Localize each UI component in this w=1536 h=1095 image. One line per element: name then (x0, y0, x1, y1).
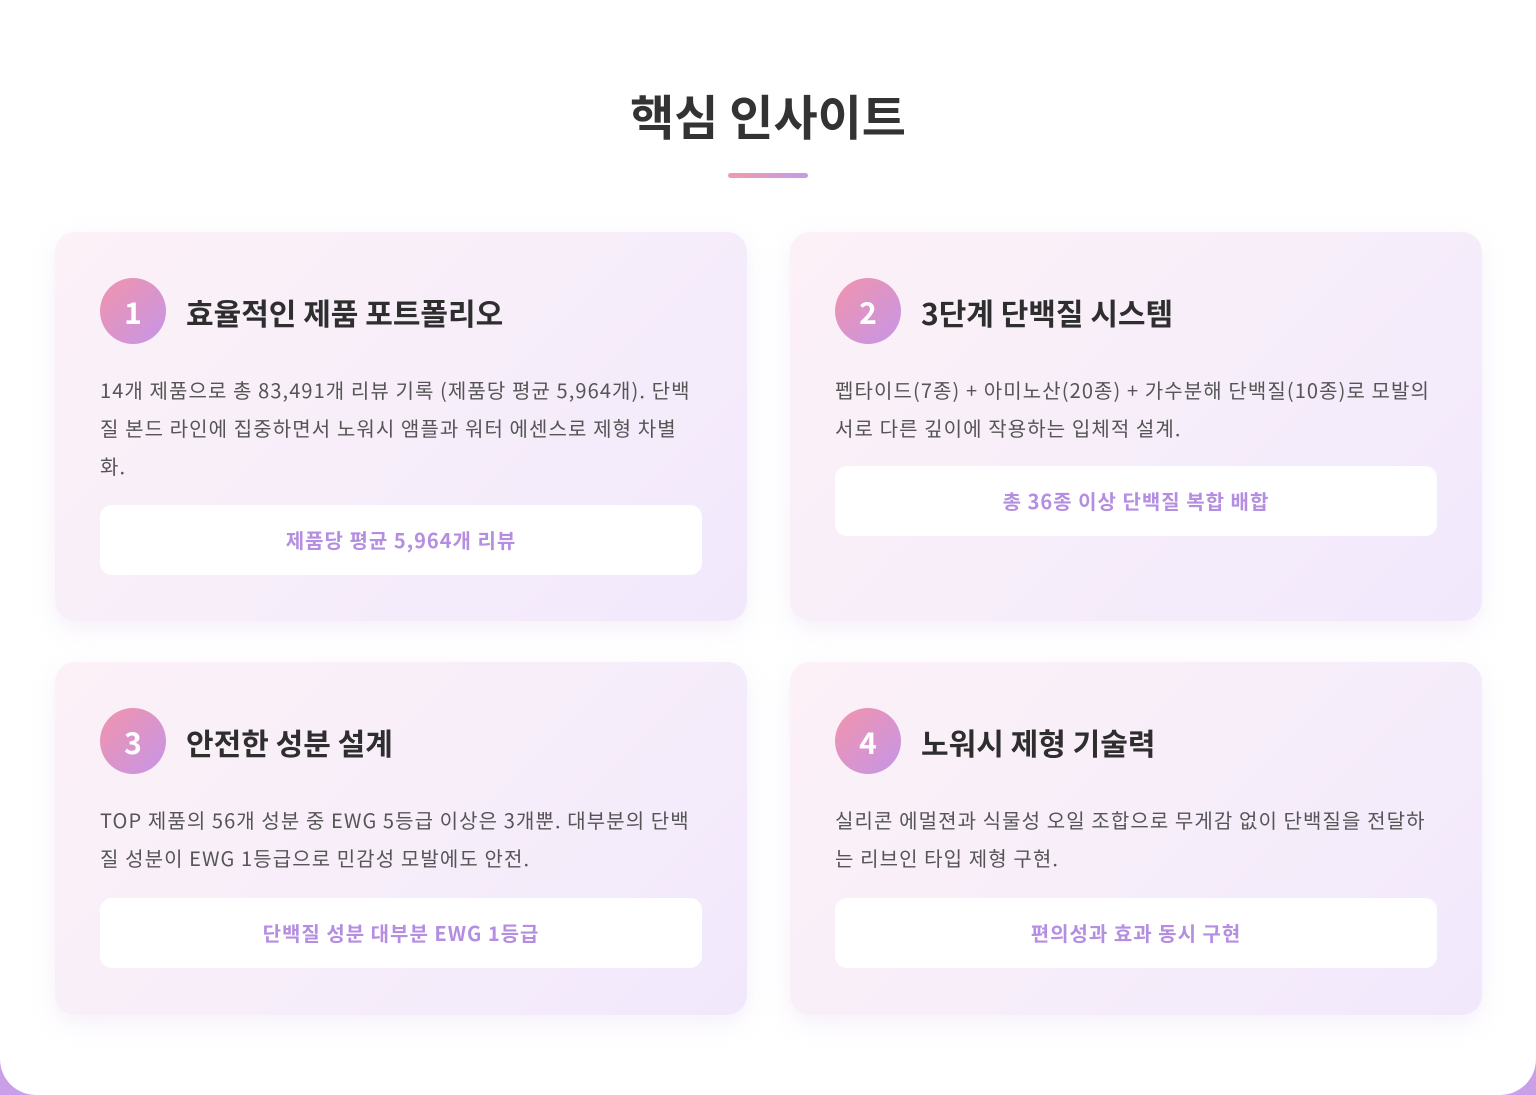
panel: insight 2 (790, 232, 1482, 621)
badge 1: 1 (124, 289, 142, 333)
highlight 3: 단백질 성분 대부분 EWG 1등급 (263, 918, 539, 947)
text 3: TOP 제품의 56개 성분 중 EWG 5등급 이상은 3개뿐. 대부분의 단백질 성분이 EWG 1등급으로 민감성 모발에도 안전. (100, 805, 690, 872)
highlight 1: 제품당 평균 5,964개 리뷰 (286, 525, 516, 554)
text 4: 실리콘 에멀젼과 식물성 오일 조합으로 무게감 없이 단백질을 전달하는 리브인 타입 제형 구현. (835, 805, 1426, 872)
badge 3: 3 (124, 719, 142, 763)
highlight 1 (100, 505, 702, 575)
title: 핵심 인사이트 (630, 79, 906, 149)
badge 4 (835, 708, 901, 774)
heading 1: 효율적인 제품 포트폴리오 (186, 290, 503, 334)
panel: insight 4 (790, 662, 1482, 1015)
text 1: 14개 제품으로 총 83,491개 리뷰 기록 (제품당 평균 5,964개). 단백질 본드 라인에 집중하면서 노워시 앰플과 워터 에센스로 제형 차별화. (100, 375, 691, 480)
badge 3 (100, 708, 166, 774)
highlight 3 (100, 898, 702, 968)
badge 1 (100, 278, 166, 344)
highlight 2: 총 36종 이상 단백질 복합 배합 (1003, 486, 1269, 515)
highlight 4 (835, 898, 1437, 968)
highlight 2 (835, 466, 1437, 536)
badge 2 (835, 278, 901, 344)
highlight 4: 편의성과 효과 동시 구현 (1031, 918, 1241, 947)
heading 4: 노워시 제형 기술력 (921, 720, 1155, 764)
text 2: 펩타이드(7종) + 아미노산(20종) + 가수분해 단백질(10종)로 모발의 서로 다른 깊이에 작용하는 입체적 설계. (835, 375, 1430, 442)
panel: insight 3 (55, 662, 747, 1015)
badge 2: 2 (859, 289, 877, 333)
heading 3: 안전한 성분 설계 (186, 720, 393, 764)
heading 2: 3단계 단백질 시스템 (921, 290, 1173, 334)
badge 4: 4 (859, 719, 877, 763)
panel: insight 1 (55, 232, 747, 621)
